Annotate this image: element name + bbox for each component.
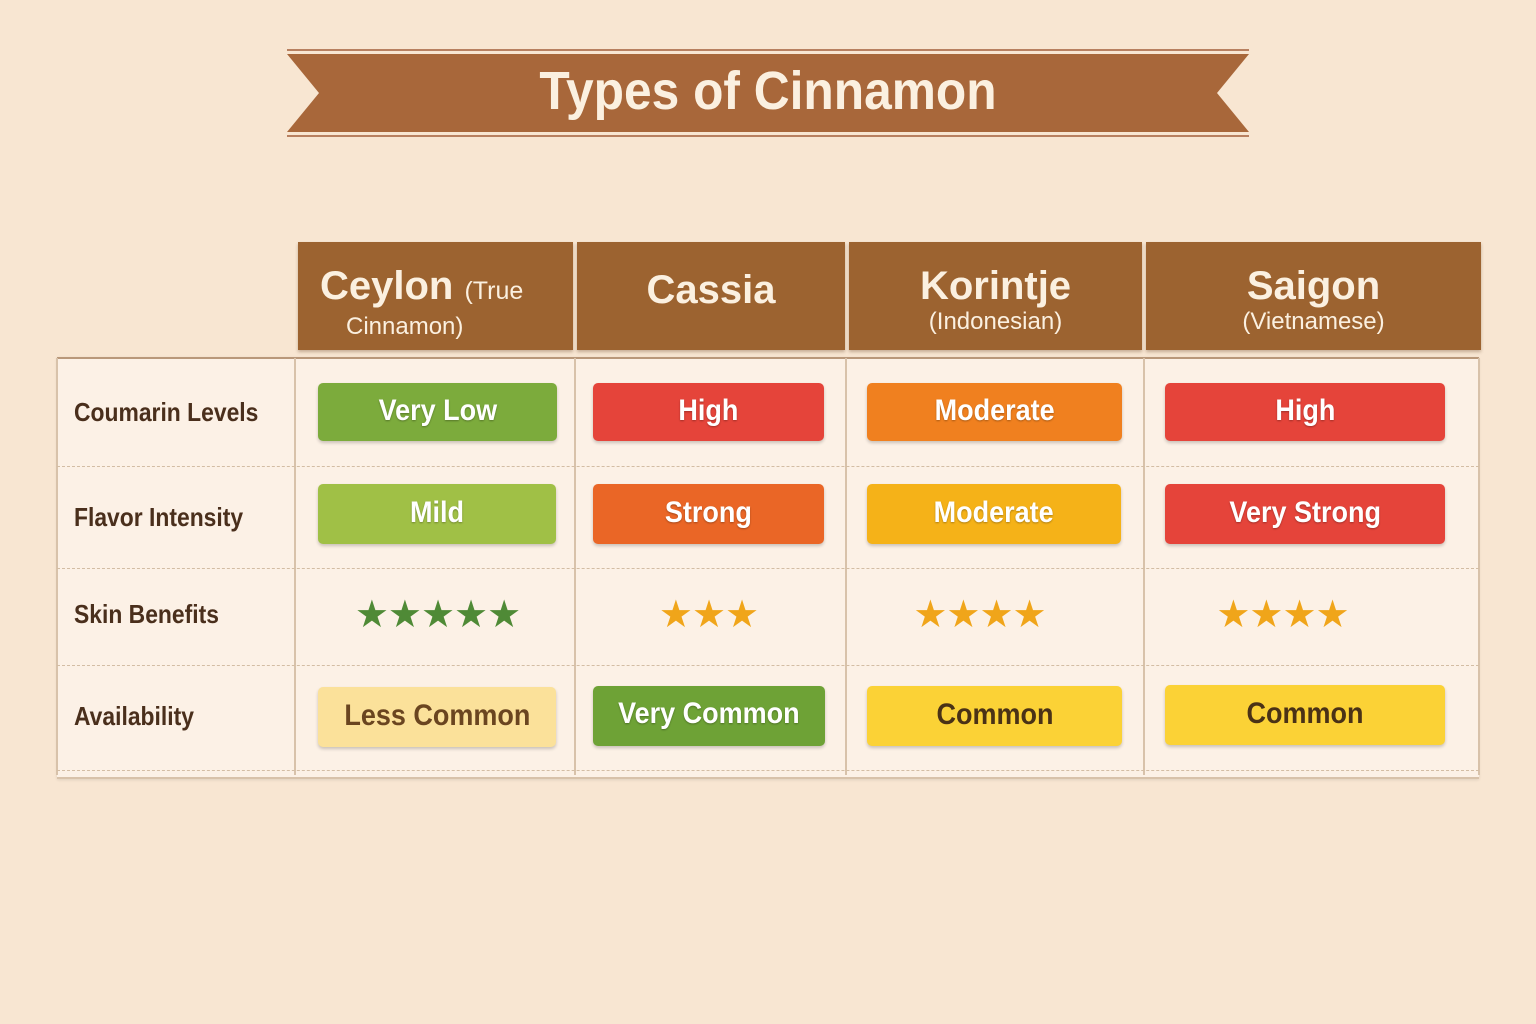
stars: 3 gold: ★★★: [659, 594, 758, 636]
badge: Less Common: Less Common: [344, 699, 530, 732]
row label: Availability: Availability: [74, 701, 194, 731]
badge: Very Strong: Very Strong: [1229, 496, 1381, 529]
badge: Common: Common: [1246, 697, 1364, 730]
header: Korintje: (Indonesian): [929, 308, 1062, 335]
badge: Common: [1165, 685, 1445, 745]
table body: [57, 357, 1479, 779]
badge: Very Low: [318, 383, 557, 441]
header: Saigon: (Vietnamese): [1242, 308, 1385, 335]
badge: High: [1165, 383, 1445, 441]
badge: Mild: [318, 484, 556, 544]
header: Saigon: Saigon: [1247, 264, 1380, 308]
badge: Moderate: Moderate: [934, 394, 1055, 427]
badge: Very Common: Very Common: [618, 697, 800, 730]
badge: Mild: Mild: [410, 496, 464, 529]
badge: Very Low: Very Low: [378, 394, 497, 427]
badge: High: High: [679, 394, 738, 427]
badge: Very Common: [593, 686, 825, 746]
row label: Coumarin Levels: Coumarin Levels: [74, 397, 258, 427]
header: Korintje: Korintje: [920, 264, 1071, 308]
header: Saigon: [1146, 242, 1481, 350]
badge: High: High: [1275, 394, 1335, 427]
badge: Very Strong: [1165, 484, 1445, 544]
row label: Skin Benefits: Skin Benefits: [74, 599, 219, 629]
header: Ceylon: [298, 242, 573, 350]
badge: Moderate: [867, 484, 1121, 544]
badge: Common: [867, 686, 1122, 746]
badge: Moderate: [867, 383, 1122, 441]
badge: Strong: [593, 484, 824, 544]
row label: Flavor Intensity: Flavor Intensity: [74, 502, 243, 532]
header: Ceylon: Cinnamon): [346, 313, 463, 340]
stars: 4 gold: ★★★★: [913, 594, 1046, 636]
header: Ceylon: Ceylon (True: [320, 264, 523, 308]
title text: Types of Cinnamon: [539, 61, 997, 121]
title banner: [287, 49, 1249, 137]
badge: Moderate: Moderate: [934, 496, 1054, 529]
badge: Less Common: [318, 687, 556, 747]
badge: Strong: Strong: [665, 496, 752, 529]
header: Korintje: [849, 242, 1142, 350]
badge: High: [593, 383, 824, 441]
badge: Common: Common: [936, 698, 1053, 731]
stars: 4 gold: ★★★★: [1216, 594, 1349, 636]
stars: 5 green: ★★★★★: [355, 594, 520, 636]
header: Cassia: [577, 242, 845, 350]
header: Cassia: Cassia: [646, 268, 775, 312]
